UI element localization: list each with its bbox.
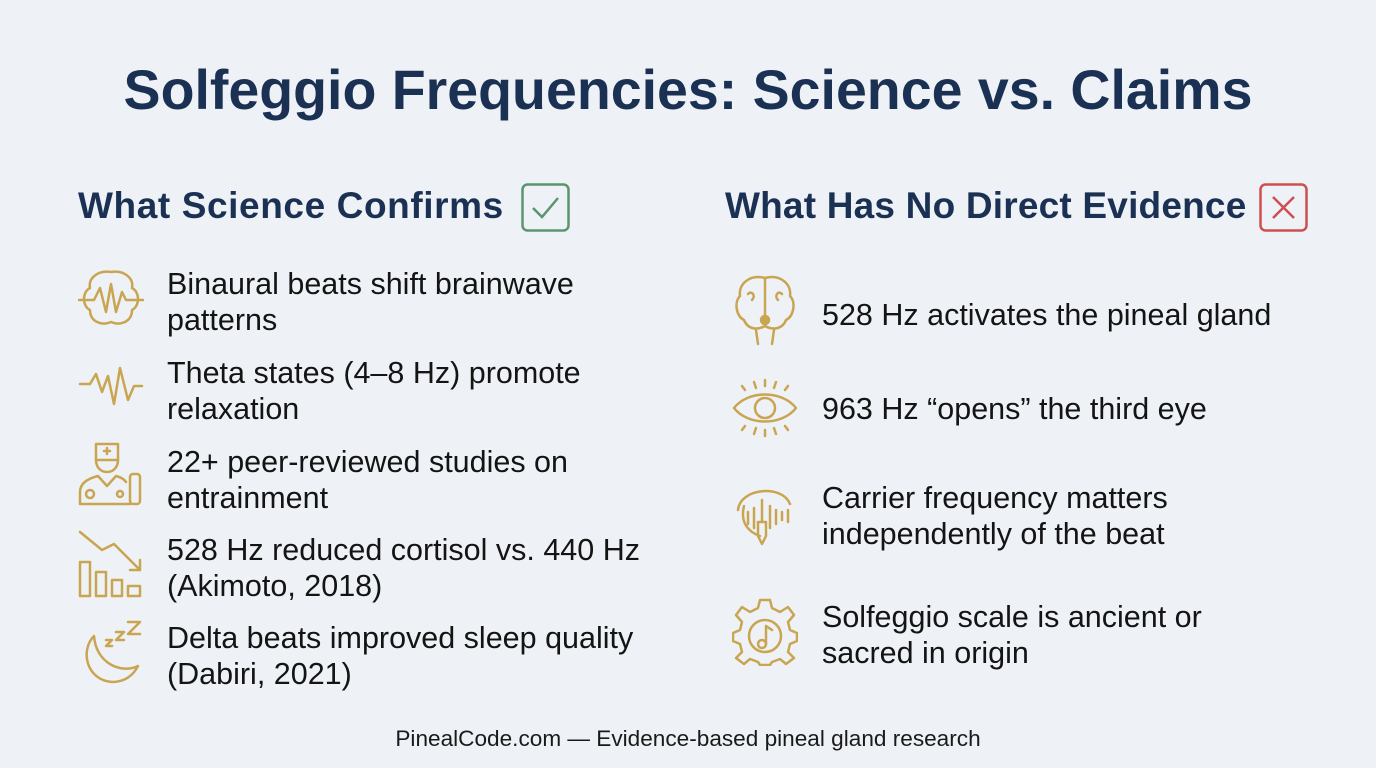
text: cortisol: 528 Hz reduced cortisol vs. 440 Hz [167,533,640,567]
icon: brain pineal [735,276,795,346]
icon: eye [732,378,798,438]
icon: checkbox [521,183,570,232]
text: carrier: independently of the beat [822,517,1165,551]
text: delta: (Dabiri, 2021) [167,657,352,691]
text: binaural: Binaural beats shift brainwave [167,267,574,301]
text: third eye: 963 Hz “opens” the third eye [822,392,1207,426]
text: binaural: patterns [167,303,277,337]
heading: no direct evidence: What Has No Direct Evidence [725,185,1246,226]
text: delta [167,621,634,691]
icon: gear note [732,598,798,666]
text: solfeggio scale [822,600,1202,670]
panel: no direct evidence list [732,276,1271,670]
text: solfeggio scale: sacred in origin [822,636,1029,670]
icon: sound wave [736,490,792,546]
text: binaural [167,267,574,337]
text: theta [167,356,581,426]
text: studies [167,445,568,515]
text: theta: Theta states (4–8 Hz) promote [167,356,581,390]
text: theta: relaxation [167,392,299,426]
text: solfeggio scale: Solfeggio scale is ancient or [822,600,1202,634]
text: cortisol: (Akimoto, 2018) [167,569,382,603]
icon: wave [78,366,144,406]
icon: doctor [78,442,142,506]
heading: science confirms: What Science Confirms [78,185,504,226]
footer: PinealCode.com — Evidence-based pineal gland research [395,726,981,751]
text: studies: entrainment [167,481,328,515]
text: pineal: 528 Hz activates the pineal gland [822,298,1271,332]
text: delta: Delta beats improved sleep quality [167,621,633,655]
text: cortisol [167,533,640,603]
title: Solfeggio Frequencies: Science vs. Claims [124,59,1252,121]
icon: brain wave [78,270,144,325]
icon: moon zzz [85,620,142,684]
text: studies: 22+ peer-reviewed studies on [167,445,568,479]
icon: declining chart [78,530,142,598]
text: carrier: Carrier frequency matters [822,481,1168,515]
panel: science confirms list [78,267,640,691]
icon: x box [1259,183,1308,232]
text: carrier [822,481,1168,551]
